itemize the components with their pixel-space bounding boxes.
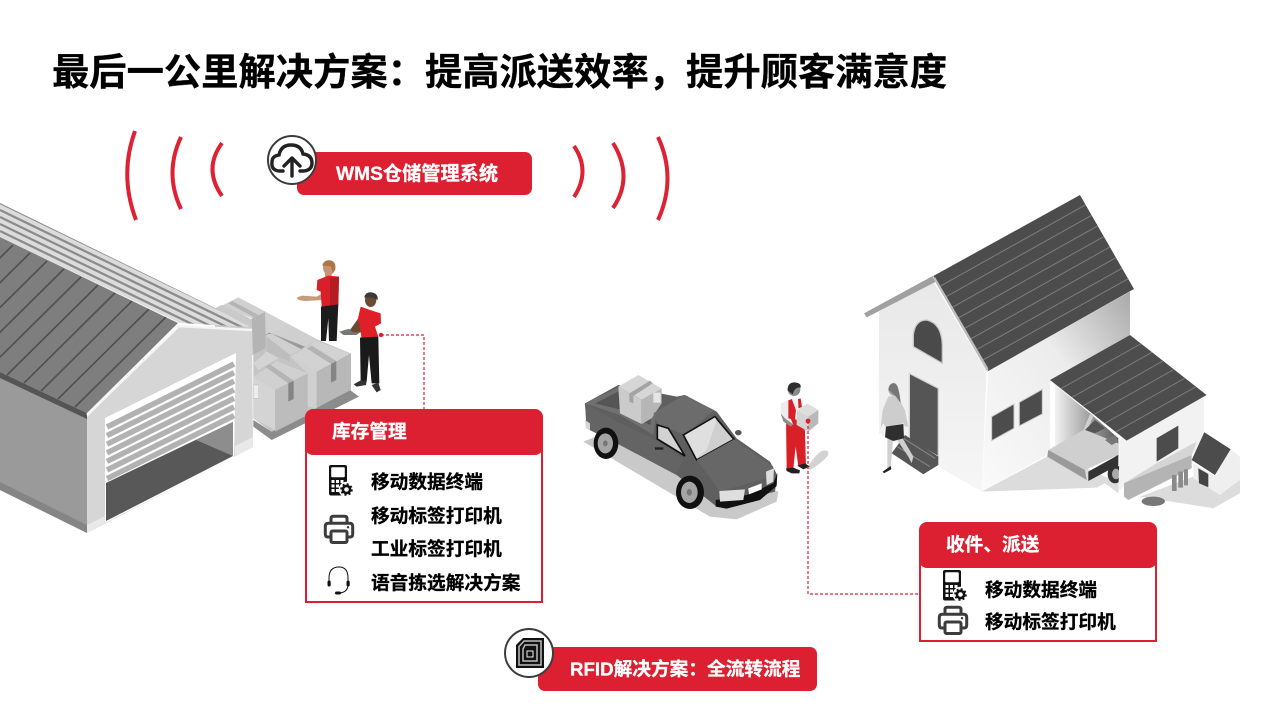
- truck wheels: [594, 428, 704, 509]
- icon: printer: [325, 516, 353, 542]
- truck cargo box: [618, 375, 662, 400]
- panel body: [306, 420, 542, 602]
- text: mobile label printer: 移动标签打印机: [985, 612, 1116, 632]
- icon: printer: [939, 607, 967, 634]
- side windows: [992, 404, 1014, 441]
- signal arcs right: [574, 137, 668, 220]
- ground shadow: [982, 453, 1120, 493]
- door: [909, 373, 938, 457]
- house: [864, 195, 1240, 508]
- arched window: [913, 320, 942, 363]
- warehouse left wall: [0, 372, 87, 533]
- text: voice picking: 语音拣选解决方案: [371, 572, 521, 594]
- RFID pill: [538, 647, 817, 691]
- text: mobile terminal: 移动数据终端: [985, 580, 1097, 600]
- main roof: [933, 195, 1134, 371]
- panel: receiving and delivery: [919, 522, 1157, 641]
- worker 2: [339, 292, 381, 392]
- panel body: [920, 532, 1156, 641]
- parked car: [1047, 414, 1122, 483]
- panel header: [919, 522, 1157, 568]
- WMS text: WMS仓储管理系统: [336, 162, 498, 185]
- pallet of boxes: [215, 297, 359, 440]
- RFID text: RFID解决方案：全流转流程: [570, 658, 801, 680]
- text: mobile terminal: 移动数据终端: [371, 472, 483, 492]
- truck front: [716, 473, 777, 509]
- panel: inventory management: [305, 409, 543, 602]
- garden wall: [1124, 455, 1192, 500]
- icon: headset: [328, 567, 349, 594]
- warehouse roof: [0, 237, 178, 413]
- icon: handheld terminal: [329, 465, 354, 497]
- title: 最后一公里解决方案：提高派送效率，提升顾客满意度: [52, 51, 947, 93]
- panel heading: 收件、派送: [946, 534, 1040, 555]
- dashed connector: inventory: [379, 333, 424, 409]
- truck body: [585, 385, 777, 507]
- truck shadow: [583, 435, 778, 519]
- delivery person: [781, 382, 828, 473]
- steps: [892, 435, 938, 474]
- icon: cloud upload: [268, 136, 316, 184]
- truck cab: [653, 395, 714, 435]
- garage interior: [1055, 385, 1118, 457]
- WMS label: [268, 136, 532, 195]
- truck: [583, 375, 778, 519]
- RFID label: [505, 629, 817, 691]
- side wall: [982, 292, 1130, 492]
- workers: [297, 260, 381, 392]
- dashed connector: delivery: [806, 419, 919, 594]
- signal arcs left: [127, 131, 222, 220]
- warehouse roller door: [105, 353, 236, 523]
- warehouse front wall: [87, 325, 253, 533]
- text: mobile label printer: 移动标签打印机: [371, 506, 502, 526]
- dog house: [1193, 449, 1240, 495]
- woman: [881, 383, 913, 473]
- icon: RFID chip: [505, 629, 553, 677]
- panel heading: 库存管理: [332, 421, 407, 442]
- roof eave: [864, 276, 935, 317]
- garage roof: [1050, 335, 1207, 441]
- warehouse: [0, 196, 260, 533]
- icon: handheld terminal: [943, 570, 968, 602]
- WMS pill: [297, 152, 532, 195]
- panel header: [305, 409, 543, 455]
- garage wall: [1118, 395, 1204, 492]
- text: industrial label printer: 工业标签打印机: [371, 538, 502, 560]
- worker 1: [297, 260, 339, 341]
- front wall: [879, 281, 987, 492]
